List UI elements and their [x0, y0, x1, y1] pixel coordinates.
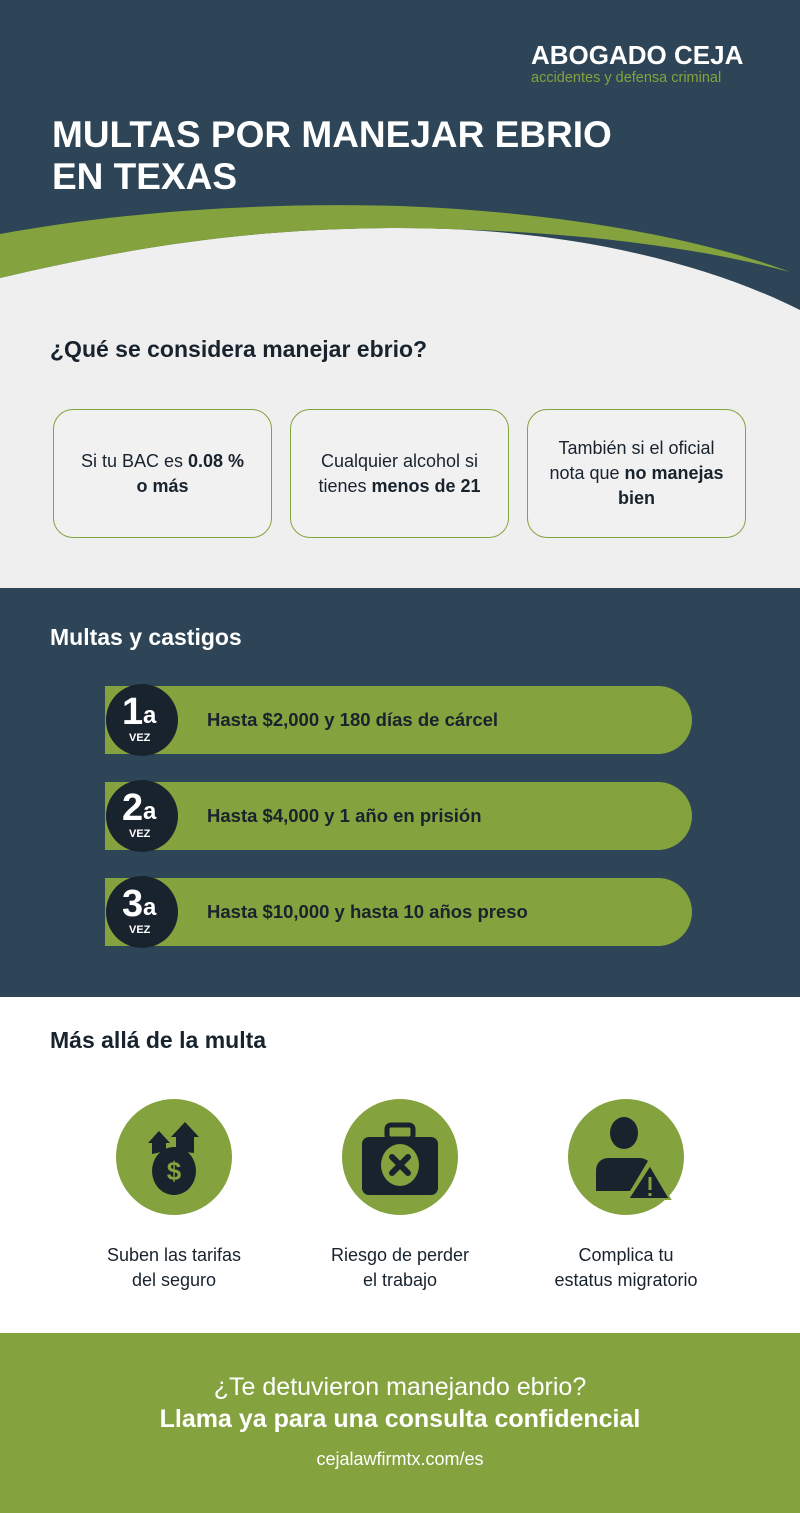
badge 1: [106, 684, 178, 756]
CTA text: [160, 1373, 640, 1433]
badge 1: 1: [122, 691, 143, 733]
badge 2: 2: [122, 787, 143, 829]
label: insurance: del seguro: [132, 1270, 216, 1290]
label: immigration: [554, 1245, 698, 1290]
heading: beyond: Más allá de la multa: [50, 1027, 266, 1053]
bar 3: [105, 878, 692, 946]
label: insurance: [107, 1245, 241, 1290]
icon: insurance: [116, 1099, 232, 1215]
card 3: [527, 409, 746, 538]
card 1: o más: [136, 476, 189, 496]
label: job: el trabajo: [363, 1270, 437, 1290]
badge 2: [106, 780, 178, 852]
icon: insurance: $: [167, 1156, 182, 1186]
label: job: Riesgo de perder: [331, 1245, 469, 1265]
footer CTA: [0, 1333, 800, 1513]
CTA text: Llama ya para una consulta confidencial: [160, 1405, 640, 1433]
card 3: También si el oficial nota que no manejas bien: [549, 438, 724, 508]
badge 3: [106, 876, 178, 948]
icon: immigration: [568, 1099, 684, 1215]
title: MULTAS POR MANEJAR EBRIO: [52, 114, 612, 155]
bar 3: Hasta $10,000 y hasta 10 años preso: [207, 901, 528, 922]
card 1: [53, 409, 272, 538]
panel: beyond: [0, 997, 800, 1333]
badge 3: a: [143, 894, 156, 921]
bar 1: [105, 686, 692, 754]
badge 3: 3: [122, 883, 143, 925]
bar 2: Hasta $4,000 y 1 año en prisión: [207, 805, 482, 826]
title: [52, 114, 612, 197]
badge 2: VEZ: [129, 828, 150, 840]
card 2: [290, 409, 509, 538]
logo: ABOGADO CEJA: [531, 40, 743, 70]
card 1: Si tu BAC es 0.08 %: [81, 450, 244, 470]
card 2: Cualquier alcohol si tienes menos de 21: [318, 450, 481, 496]
header background with wave: [0, 0, 800, 310]
url: cejalawfirmtx.com/es: [316, 1449, 484, 1469]
badge 3: VEZ: [129, 924, 150, 936]
badge 1: VEZ: [129, 732, 150, 744]
badge 1: a: [143, 702, 156, 729]
bar 2: [105, 782, 692, 850]
label: immigration: Complica tu: [578, 1245, 674, 1265]
label: immigration: estatus migratorio: [554, 1270, 698, 1290]
badge 2: a: [143, 798, 156, 825]
panel: fines: [0, 588, 800, 997]
icon: briefcase: [342, 1099, 458, 1215]
CTA text: ¿Te detuvieron manejando ebrio?: [214, 1373, 586, 1401]
logo: [531, 40, 743, 86]
heading: what is DWI: ¿Qué se considera manejar ebrio?: [50, 336, 427, 362]
title: EN TEXAS: [52, 156, 237, 197]
logo: accidentes y defensa criminal: [531, 70, 721, 86]
label: insurance: Suben las tarifas: [107, 1245, 241, 1265]
label: job: [331, 1245, 469, 1290]
heading: fines: Multas y castigos: [50, 624, 242, 650]
bar 1: Hasta $2,000 y 180 días de cárcel: [207, 709, 498, 730]
